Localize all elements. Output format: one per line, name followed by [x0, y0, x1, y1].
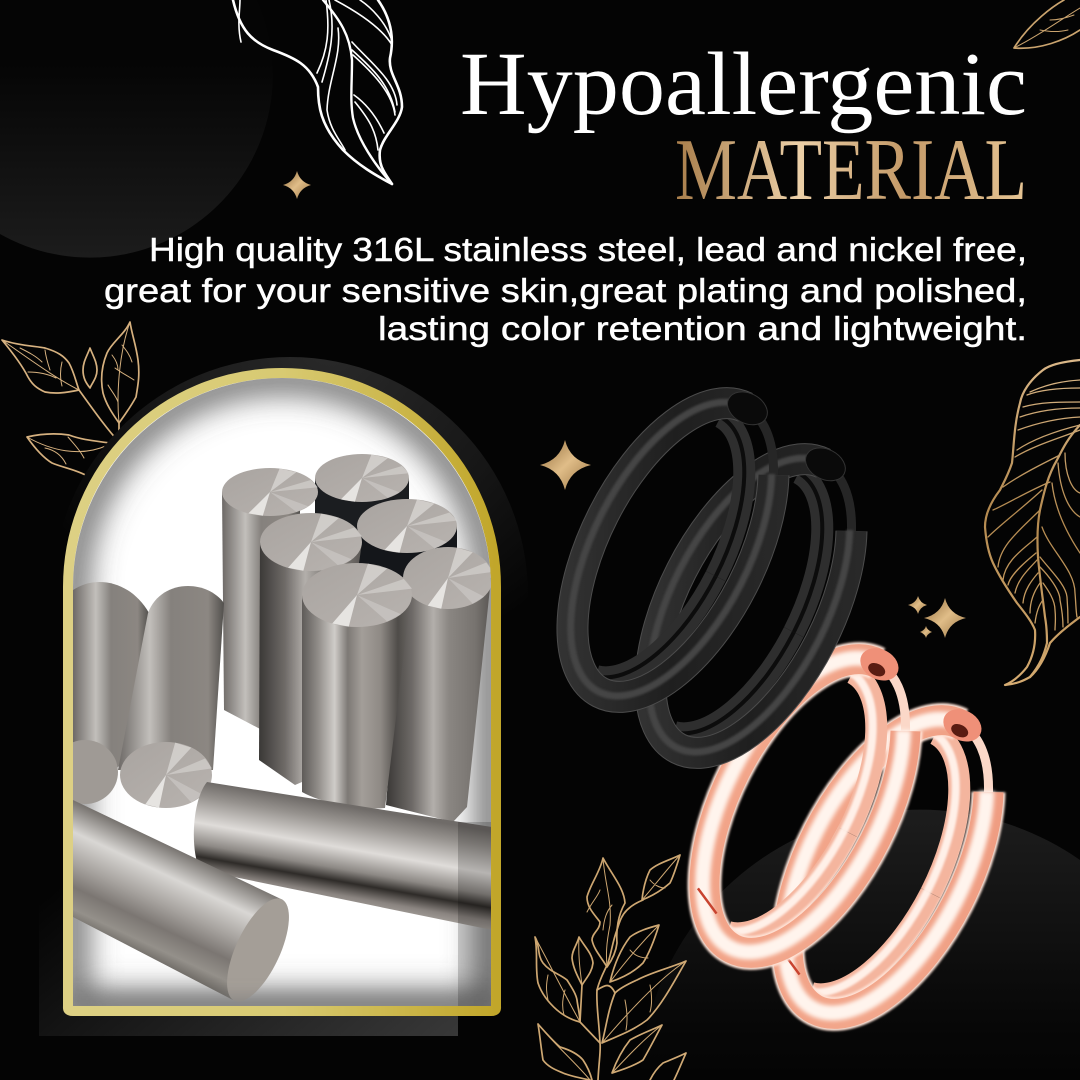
description text — [104, 231, 1027, 347]
band — [663, 628, 947, 984]
black hoop left — [524, 355, 822, 728]
decorative circle bottom right — [640, 810, 1080, 1080]
photo vignette bottom — [60, 1000, 505, 1012]
arch frame — [68, 373, 496, 1011]
rod: left lying — [73, 582, 148, 804]
hinge — [722, 385, 773, 431]
arch shadow bottom panel — [39, 700, 458, 1036]
band — [609, 428, 893, 784]
inner wall — [607, 442, 859, 761]
inner wall — [744, 703, 996, 1022]
hinge — [800, 441, 851, 487]
black hoop right — [602, 411, 900, 784]
gold branch bottom — [535, 855, 686, 1080]
rod: second left — [118, 586, 224, 808]
rod: back left — [222, 468, 318, 730]
rod: front centre — [302, 563, 412, 808]
photo: steel rods — [52, 378, 505, 1010]
rod: horizontal lower left — [73, 800, 289, 1000]
rose gold hoop right — [735, 670, 1037, 1045]
gold leaf top right corner — [1014, 0, 1080, 48]
description text: great for your sensitive skin,great plating and polished, — [104, 272, 1027, 309]
rose gold hoop left — [652, 609, 954, 984]
photo vignette — [73, 378, 491, 1006]
rod: horizontal right — [194, 782, 492, 930]
title: Hypoallergenic: Hypoallergenic — [460, 35, 1027, 134]
description text: High quality 316L stainless steel, lead and nickel free, — [149, 231, 1027, 268]
wire — [663, 628, 947, 984]
hinge — [855, 642, 904, 687]
wire — [531, 372, 815, 728]
description text: lasting color retention and lightweight. — [378, 310, 1027, 347]
rod: front left of group — [259, 513, 362, 785]
sparkle: middle — [540, 440, 591, 490]
white line leaf top — [233, 0, 402, 184]
band — [531, 372, 815, 728]
wire — [746, 689, 1030, 1045]
arch shadow top — [52, 357, 528, 833]
gold leaf right — [985, 360, 1080, 685]
notch — [692, 888, 723, 914]
rod: far back centre — [315, 454, 409, 530]
wire — [609, 428, 893, 784]
dark overlay strip — [458, 822, 491, 1006]
inner wall — [661, 642, 913, 961]
sparkle cluster right — [908, 596, 966, 638]
rod: front right — [386, 547, 493, 822]
hinge — [938, 703, 987, 748]
band — [746, 689, 1030, 1045]
notch — [775, 949, 806, 975]
inner wall — [529, 386, 781, 705]
decorative circle top left — [0, 0, 273, 258]
sparkle: top — [283, 171, 311, 199]
gold leaves left — [2, 322, 139, 478]
rod: back right — [357, 499, 457, 562]
